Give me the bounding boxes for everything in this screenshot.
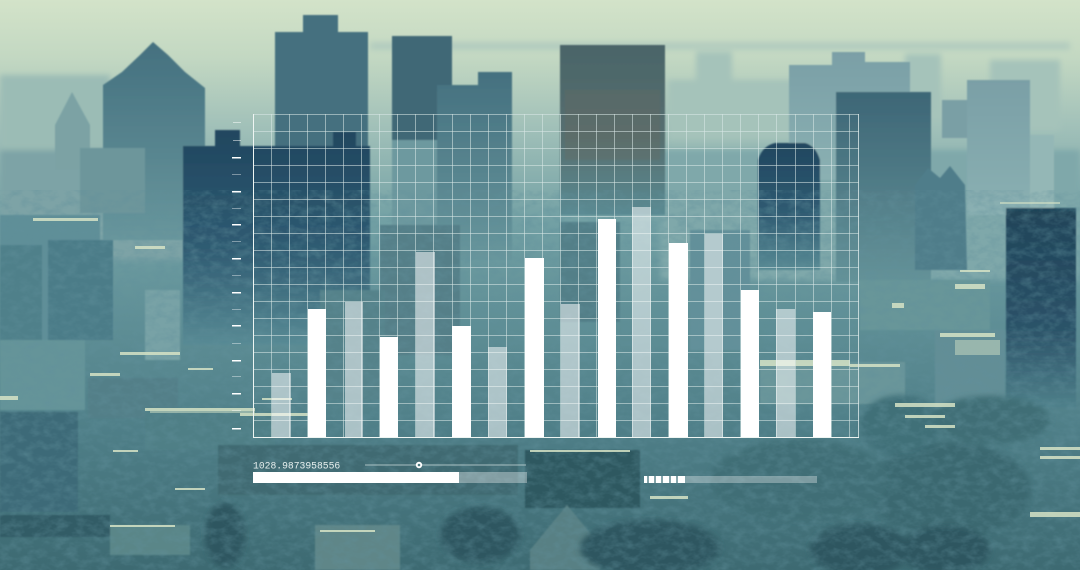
building: pale tower right — [967, 80, 1030, 215]
chart: solid bars — [308, 219, 831, 437]
building: wide dark block — [183, 130, 370, 345]
chart: grid lines — [253, 114, 859, 437]
background: texture — [0, 190, 1080, 570]
background: skyscrapers — [55, 15, 1076, 408]
building: domed tower — [915, 166, 967, 270]
building: pale tower — [789, 52, 910, 180]
building: glass highlights — [565, 90, 660, 160]
building: brown glass tower — [560, 45, 665, 215]
progress bar right — [644, 476, 817, 483]
chart: axis lines — [254, 114, 859, 438]
chart: translucent bars — [272, 207, 795, 437]
background: trees — [205, 395, 1050, 570]
progress bar left — [253, 472, 527, 483]
building: pointed tower left — [103, 42, 205, 240]
building: round dark tower — [758, 143, 820, 270]
slider — [365, 462, 526, 468]
chart: y-axis ticks — [232, 122, 241, 430]
readout number: 1028.9873958556 — [253, 460, 340, 472]
building: mid tower — [437, 72, 512, 260]
building: dark block — [392, 36, 452, 146]
building: dark tower far right — [1006, 208, 1076, 408]
background: distant skyline — [0, 42, 1080, 280]
building: dark tower right — [836, 92, 931, 282]
background: mid-city blocks — [0, 215, 1005, 570]
background: sunlit rooftops — [0, 202, 1080, 532]
building: central left tower — [275, 15, 368, 150]
